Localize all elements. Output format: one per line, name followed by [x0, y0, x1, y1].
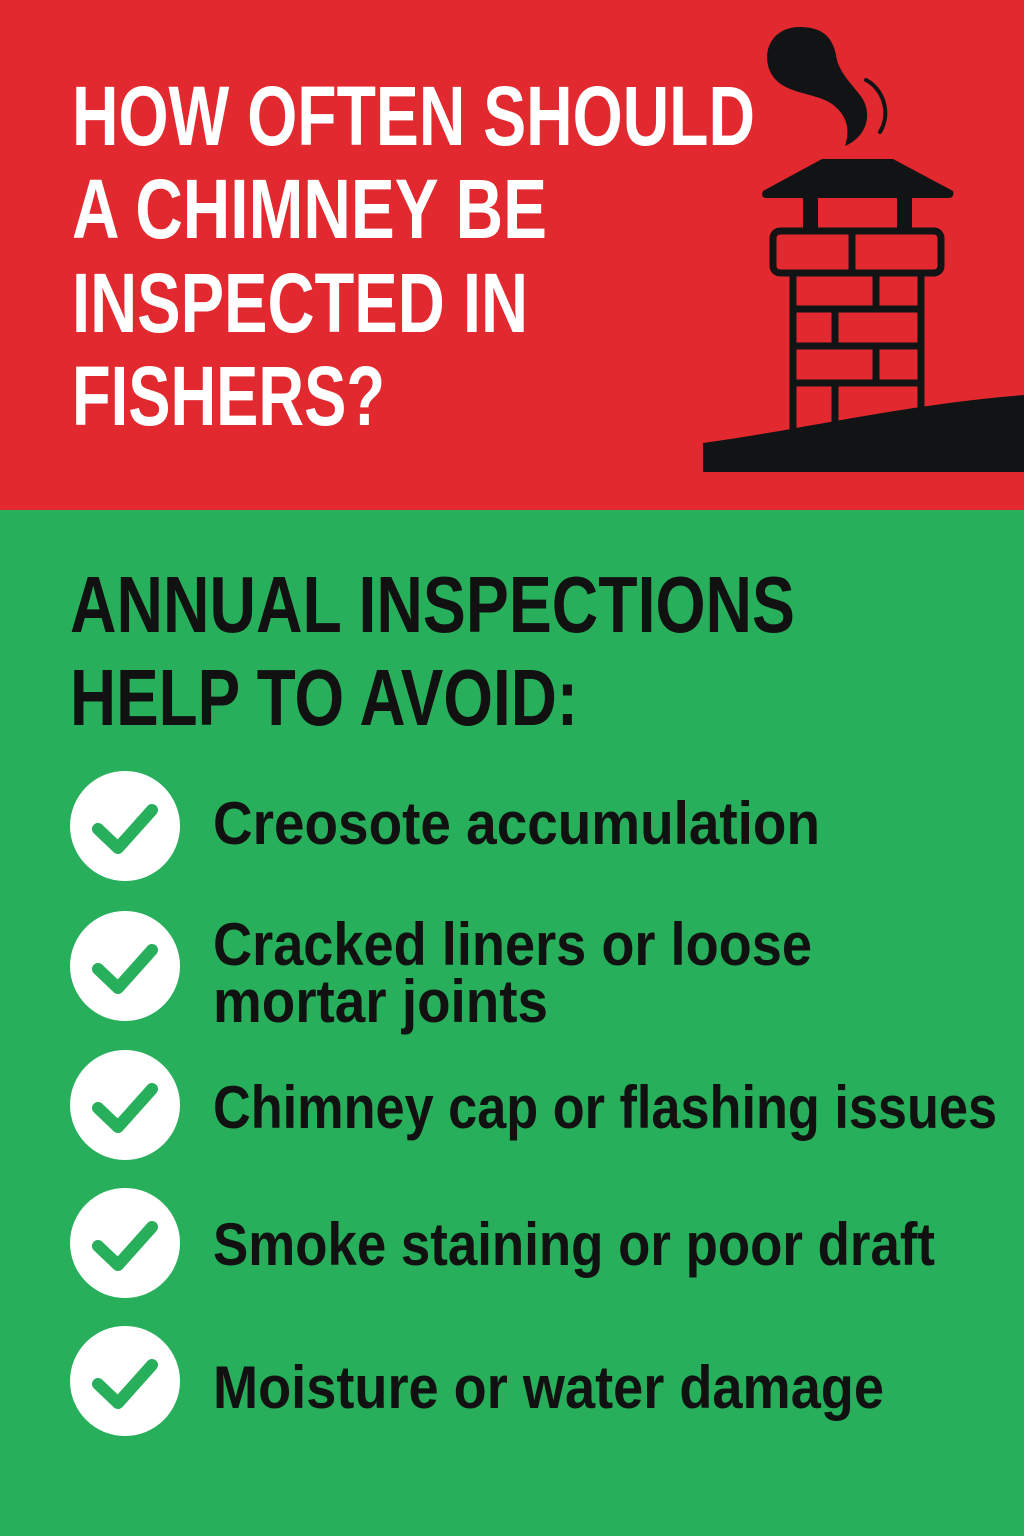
item 3 [70, 1050, 997, 1160]
item 5: Moisture or water damage [213, 1354, 884, 1421]
heading: annual inspections: HELP TO AVOID: [70, 653, 578, 742]
item 1 [70, 771, 820, 881]
icon: roof ground [703, 395, 1024, 472]
item 1: Creosote accumulation [213, 790, 820, 857]
icon: chimney cap [762, 159, 953, 198]
item 2: mortar joints [213, 968, 548, 1035]
icon: chimney with smoke [703, 27, 1024, 472]
panel: red header [0, 0, 1024, 510]
title: INSPECTED IN [72, 256, 528, 350]
icon: smoke [767, 27, 885, 146]
title: A CHIMNEY BE [72, 162, 547, 256]
title [72, 69, 755, 443]
item 4: Smoke staining or poor draft [213, 1211, 935, 1278]
title: HOW OFTEN SHOULD [72, 69, 755, 163]
icon: brick band [773, 231, 941, 443]
heading: annual inspections: ANNUAL INSPECTIONS [70, 560, 795, 649]
item 5 [70, 1326, 884, 1436]
item 4 [70, 1188, 935, 1298]
item 2: Cracked liners or loose [213, 911, 812, 978]
heading: annual inspections [70, 560, 795, 742]
checklist [70, 771, 997, 1436]
item 2 [70, 911, 812, 1035]
title: FISHERS? [72, 349, 385, 443]
panel: green body [0, 510, 1024, 1536]
